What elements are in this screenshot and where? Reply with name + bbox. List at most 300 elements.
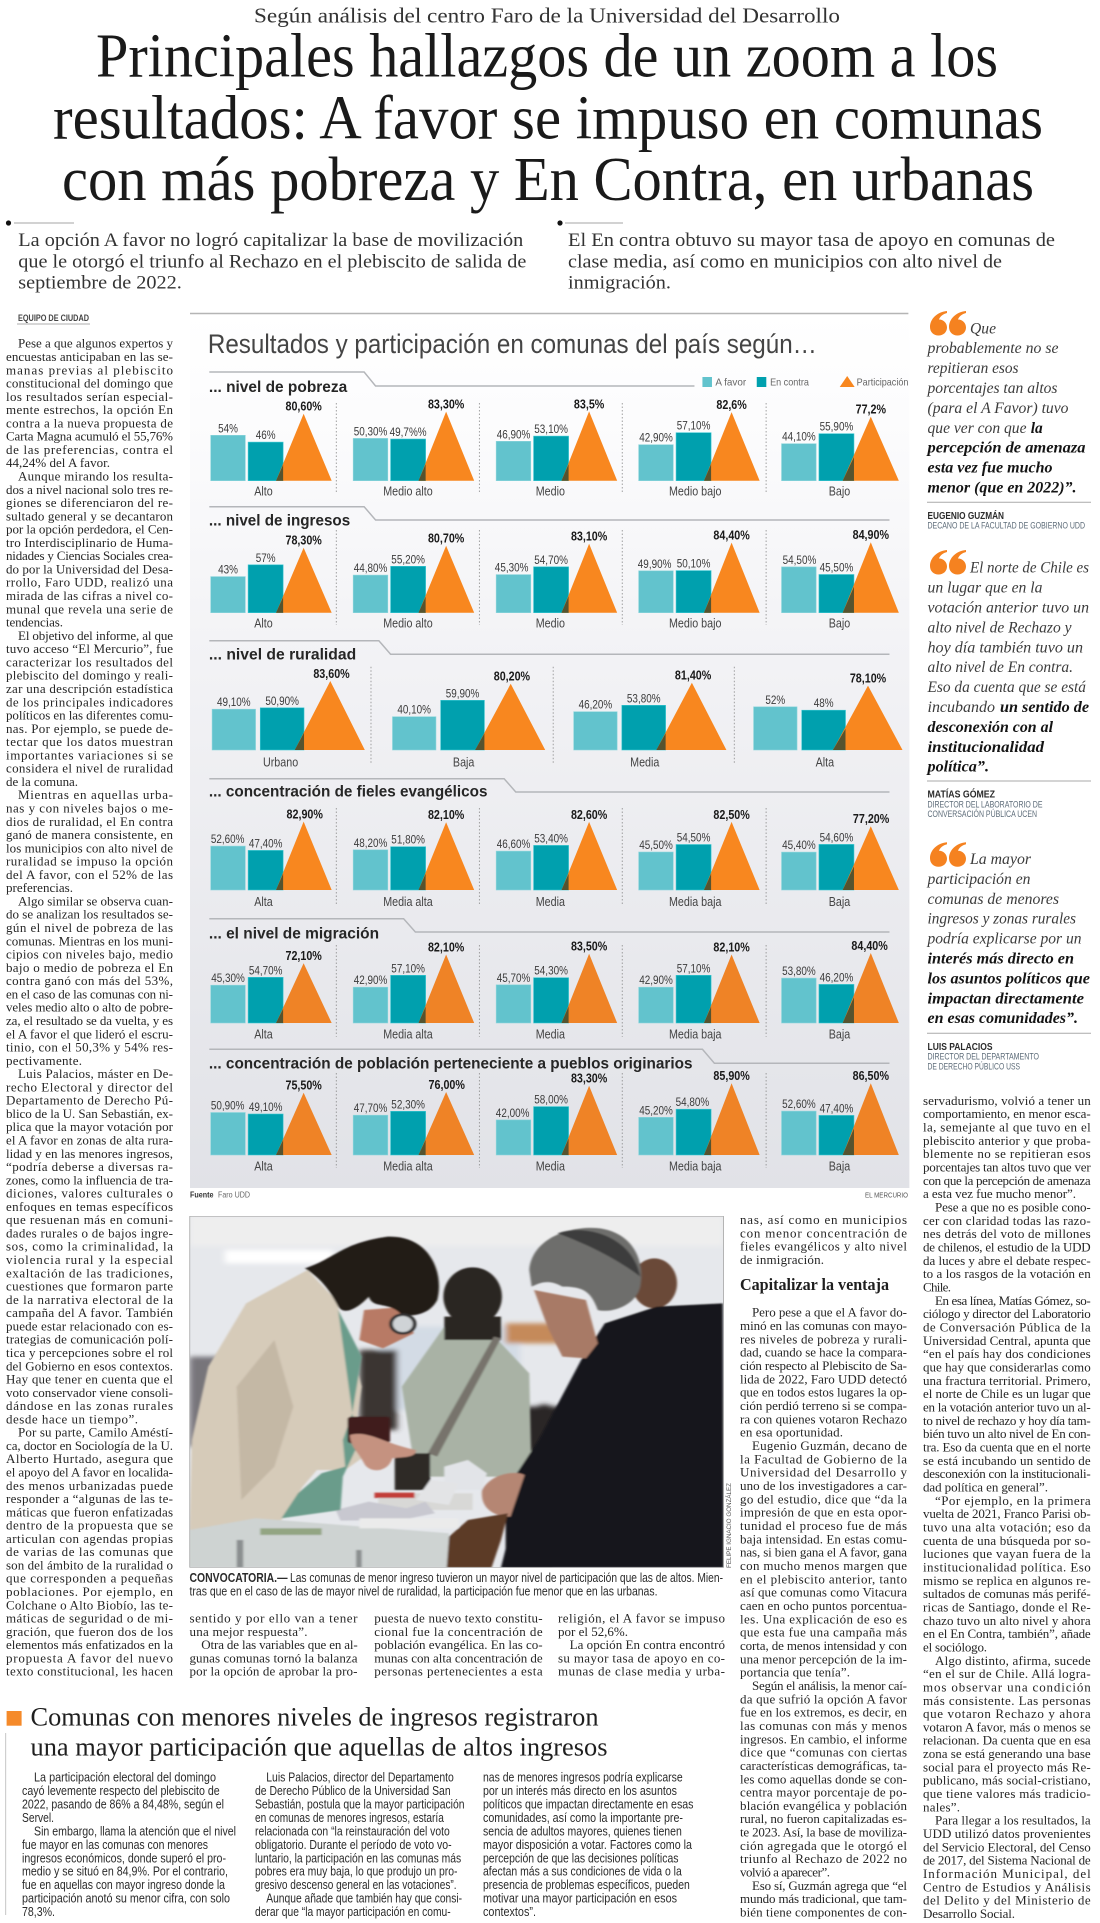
article last column: con que la percepción de amenaza bbox=[923, 1173, 1091, 1188]
pull quote: Matías Gómez: política”. bbox=[925, 759, 989, 776]
deck right bbox=[557, 220, 1055, 294]
ballot box bbox=[189, 1518, 449, 1568]
photo caption: Las comunas de menor ingreso tuvieron un mayor nivel de participación que las de altos. Mien- bbox=[290, 1571, 723, 1585]
legend: Participación bbox=[857, 378, 908, 389]
article column 1: gún el nivel de pobreza de las bbox=[6, 920, 173, 935]
article column 1: Departamento de Derecho Pú- bbox=[6, 1093, 173, 1108]
bars: Baja: 54,60% bbox=[820, 832, 853, 845]
heading: ... nivel de pobreza bbox=[209, 379, 347, 396]
sidebar column 1 bbox=[22, 1771, 236, 1919]
article column beside photo: fieles evangélicos y alto nivel bbox=[740, 1239, 907, 1254]
article last column: Centro de Estudios y Análisis bbox=[923, 1879, 1091, 1894]
bars: Alto: Alto bbox=[254, 484, 273, 499]
bars: Medio: 53,10% bbox=[534, 423, 568, 436]
article column beside photo: bién tiene componentes de con- bbox=[740, 1905, 907, 1920]
article column 1: exaltación de las tradiciones, bbox=[6, 1265, 173, 1280]
article last column: de chilenos, el estudio de la UDD bbox=[923, 1240, 1091, 1254]
bars: Media: 83,30% bbox=[571, 1071, 608, 1086]
article last column: tuvo una alta votación; eso da bbox=[923, 1520, 1091, 1534]
bars: Medio: 83,5% bbox=[574, 396, 605, 412]
article column 1: tinio, con el 50,3% y 54% res- bbox=[6, 1040, 173, 1054]
pull quote: Eugenio Guzmán: esta vez fue mucho bbox=[928, 460, 1052, 477]
article column 1 bbox=[6, 336, 174, 1679]
bars: Bajo: 45,50% bbox=[820, 562, 853, 575]
article last column: Información Municipal, del bbox=[923, 1866, 1091, 1881]
article column 1: zar una descripción estadística bbox=[6, 681, 173, 696]
heading: ... concentración de población perteneciente a pueblos originarios bbox=[209, 1055, 693, 1072]
article column 1: texto constitucional, les hacen bbox=[6, 1664, 174, 1679]
bars: Alta: 52,60% bbox=[211, 833, 245, 846]
icon: quote mark bbox=[930, 842, 966, 867]
article last column: “en el sur de Chile. Allá logra- bbox=[923, 1666, 1091, 1681]
article column beside photo: que esta fue una campaña más bbox=[740, 1625, 907, 1640]
bars: Alta bbox=[754, 671, 903, 770]
article column 1: máticas de seguridad o de mi- bbox=[6, 1611, 173, 1626]
bars: Baja: Baja bbox=[829, 894, 851, 909]
article column 1: son del ámbito de la ruralidad o bbox=[6, 1558, 173, 1572]
article column 1: Mientras en aquellas urba- bbox=[18, 787, 173, 802]
article last column: vuelta de 2021, Franco Parisi ob- bbox=[923, 1506, 1091, 1521]
pull quote: Matías Gómez: alto nivel de En contra. bbox=[928, 659, 1073, 676]
pull quote: Matías Gómez: El norte de Chile es bbox=[969, 560, 1089, 577]
bars: Baja: 47,40% bbox=[820, 1103, 853, 1116]
article column beside photo: dad, cuando se hace la compara- bbox=[740, 1345, 907, 1360]
hair behind man bbox=[632, 1258, 677, 1308]
bars: Alta: 48% bbox=[814, 697, 834, 710]
kicker: Según análisis del centro Faro de la Universidad del Desarrollo bbox=[254, 4, 840, 28]
article column 1: los municipios con alto nivel de bbox=[6, 840, 173, 855]
article last column: mos observar una condición bbox=[923, 1679, 1091, 1694]
bars: Media baja: 45,50% bbox=[639, 839, 673, 852]
article last column: en la votación anterior tuvo un al- bbox=[923, 1400, 1091, 1414]
sidebar column 3: presencia de problemas específicos, pueden bbox=[483, 1878, 690, 1892]
article last column: que hay que considerarlas como bbox=[923, 1360, 1091, 1374]
pull quote: Matías Gómez: hoy día también tuvo un bbox=[928, 639, 1083, 656]
pull quote: Luis Palacios: LUIS PALACIOS bbox=[928, 1042, 993, 1053]
article column 1: Carta Magna acumuló el 55,76% bbox=[6, 429, 173, 444]
article column beside photo: nas, si bien gana el A favor, gana bbox=[740, 1545, 907, 1560]
legend: En contra bbox=[770, 378, 809, 389]
article last column: de 2017, del Sistema Nacional de bbox=[923, 1853, 1091, 1868]
sidebar column 3: contextos”. bbox=[483, 1905, 536, 1919]
article column 1: tica y percepciones sobre el rol bbox=[6, 1345, 173, 1360]
bars: Media baja bbox=[639, 939, 760, 1042]
bars: Medio bajo: Medio bajo bbox=[669, 484, 722, 499]
article column 1: nas y con niveles bajos o me- bbox=[6, 800, 173, 816]
man jacket bbox=[506, 1303, 724, 1568]
article column beside photo: una menor percepción de la im- bbox=[740, 1651, 907, 1666]
sidebar column 3: por un interés más directo en los asuntos bbox=[483, 1784, 677, 1798]
bars: Alto: 46% bbox=[256, 429, 276, 442]
article column 1: cuestiones que formaron parte bbox=[6, 1279, 173, 1294]
article last column: Algo distinto, afirma, sucede bbox=[935, 1653, 1091, 1668]
article last column: votaron A favor, más o menos se bbox=[923, 1719, 1091, 1734]
article column beside photo: triunfo al Rechazo de 2022 no bbox=[740, 1851, 907, 1866]
bars: Alta bbox=[211, 807, 332, 909]
bars: Urbano: Urbano bbox=[263, 755, 298, 770]
bars: Baja bbox=[782, 1068, 899, 1174]
pull quote: Matías Gómez: institucionalidad bbox=[928, 739, 1045, 756]
deck right: inmigración. bbox=[568, 274, 671, 294]
bars: Baja: 52,60% bbox=[782, 1098, 816, 1111]
article column 1: Colchane o Alto Biobío, las te- bbox=[6, 1597, 173, 1612]
article column 1: el A favor en zonas de alta rura- bbox=[6, 1132, 173, 1148]
bars: Medio alto: 50,30% bbox=[354, 426, 388, 439]
article column beside photo: uno de los investigadores a car- bbox=[740, 1478, 907, 1493]
man head bbox=[534, 1290, 598, 1358]
sidebar column 2 bbox=[255, 1771, 465, 1919]
article column beside photo: ción perdió terreno si se compa- bbox=[740, 1398, 907, 1413]
pull quote: Eugenio Guzmán: percepción de amenaza bbox=[925, 440, 1086, 457]
bars: Media alta: Media alta bbox=[383, 894, 433, 909]
article column 1: máticas que fueron enfatizadas bbox=[6, 1504, 173, 1519]
article column beside photo: Universidad del Desarrollo y bbox=[740, 1465, 908, 1480]
article column beside photo bbox=[740, 1212, 908, 1920]
bars: Media baja: 54,50% bbox=[677, 832, 711, 845]
article column beside photo: de inmigración. bbox=[740, 1252, 824, 1267]
bars: Alta: 78,10% bbox=[850, 671, 887, 686]
article column 1: rrollo, Faro UDD, realizó una bbox=[6, 575, 173, 590]
bars: Medio alto: Medio alto bbox=[383, 484, 433, 499]
bars: Alto: 54% bbox=[218, 422, 238, 436]
bars: Media alta: 47,70% bbox=[354, 1102, 388, 1115]
article column 1: de la comuna. bbox=[6, 774, 78, 789]
article column 1: encuestas anticipaban en las se- bbox=[6, 349, 173, 364]
bars: Media baja: 82,50% bbox=[713, 807, 750, 822]
article last column: Desarrollo Social. bbox=[923, 1906, 1015, 1921]
subheading: Capitalizar la ventaja bbox=[740, 1275, 889, 1294]
article column 1: ruralidad se impuso la opción bbox=[6, 854, 174, 869]
bars: Media alta: 51,80% bbox=[391, 834, 425, 847]
article column beside photo: te 2023. Así, la base de moviliza- bbox=[740, 1825, 907, 1840]
pull quote: Matías Gómez: incubando bbox=[928, 699, 995, 716]
sidebar column 2: Luis Palacios, director del Departamento bbox=[266, 1771, 454, 1785]
article column beside photo: así que comunas como Vitacura bbox=[740, 1585, 907, 1600]
sidebar column 2: de Derecho Público de la Universidad San bbox=[255, 1784, 451, 1798]
sidebar column 1: fue mayor en las comunas con menores bbox=[22, 1838, 208, 1852]
sidebar column 1: participación anotó su menor cifra, con solo bbox=[22, 1892, 230, 1906]
article column 1: sultado general y se decantaron bbox=[6, 508, 174, 523]
bars: Medio bajo bbox=[639, 397, 760, 499]
bars: Alta: 45,30% bbox=[211, 972, 245, 985]
article column beside photo: caen en ocho puntos porcentua- bbox=[740, 1598, 907, 1613]
bars: Media: 58,00% bbox=[534, 1094, 568, 1107]
article last column: ciólogo y director del Laboratorio bbox=[923, 1306, 1091, 1321]
bars: Media: 53,40% bbox=[534, 833, 568, 846]
article last column: zona se está generando una base bbox=[923, 1746, 1091, 1761]
article column 4 under photo: munas de clase media y urba- bbox=[558, 1664, 725, 1679]
article column beside photo: ción agregada que le otorgó el bbox=[740, 1838, 907, 1853]
bars: Medio bajo: 82,6% bbox=[716, 397, 747, 412]
article column 1: blico de la U. San Sebastián, ex- bbox=[6, 1106, 173, 1121]
ballot papers on table bbox=[378, 1493, 473, 1510]
bars: Medio: 46,90% bbox=[497, 428, 530, 442]
bars: Media baja bbox=[639, 807, 760, 909]
icon: orange square bbox=[7, 1711, 22, 1726]
bars: Medio bajo bbox=[638, 528, 760, 631]
pull quote: Luis Palacios: podría explicarse por un bbox=[927, 931, 1082, 948]
article column 1: sos, como la criminalidad, la bbox=[6, 1239, 173, 1254]
sidebar column 1: medio y se situó en 84,9%. Por el contrario, bbox=[22, 1865, 228, 1879]
article column 1: en el caso de las comunas con ni- bbox=[6, 986, 173, 1001]
bars: Bajo: 54,50% bbox=[783, 554, 816, 567]
article last column: En esa línea, Matías Gómez, so- bbox=[935, 1293, 1091, 1308]
pull quote: Matías Gómez: DIRECTOR DEL LABORATORIO DE bbox=[928, 799, 1042, 809]
article column 1: mente estrechos, la opción En bbox=[6, 402, 174, 417]
bars: Media: 83,50% bbox=[571, 939, 608, 954]
article last column: cuenta de una búsqueda por so- bbox=[923, 1533, 1091, 1548]
article column 1: articulan con agendas propias bbox=[6, 1531, 173, 1546]
article column 1: plica que la mayor votación por bbox=[6, 1119, 174, 1134]
bars: Media: 54,30% bbox=[534, 965, 568, 978]
bars: Media: Media bbox=[630, 755, 660, 770]
article column 1: tuvo acceso “El Mercurio”, fue bbox=[6, 641, 173, 656]
bars: Urbano: 50,90% bbox=[265, 695, 299, 708]
bars: Baja: 77,20% bbox=[853, 811, 890, 826]
article last column: una fractura territorial. Primero, bbox=[923, 1373, 1091, 1388]
bars: Alta: Alta bbox=[254, 1159, 273, 1174]
article column 1: caracterizar los resultados del bbox=[6, 654, 173, 669]
article last column bbox=[923, 1093, 1091, 1921]
bars: Alta: 82,90% bbox=[287, 807, 323, 822]
chart section: pueblos originarios bbox=[209, 1049, 899, 1174]
chart source: Fuente bbox=[190, 1190, 214, 1200]
bars: Alta: 49,10% bbox=[249, 1101, 283, 1114]
pull quote: Eugenio Guzmán: menor (que en 2022)”. bbox=[928, 480, 1076, 496]
chart title: Resultados y participación en comunas del país según… bbox=[208, 329, 817, 359]
bars: Urbano: 83,60% bbox=[313, 666, 350, 681]
article column 1: giones se diferenciaron del re- bbox=[6, 495, 173, 510]
photo: voters at polling station bbox=[189, 1216, 724, 1568]
heading: ... nivel de ruralidad bbox=[209, 646, 356, 663]
article column beside photo: les como aquellas donde se con- bbox=[740, 1771, 907, 1786]
sidebar column 3: políticos que impactan directamente en esas bbox=[483, 1798, 694, 1812]
bars: Media: 46,60% bbox=[497, 838, 530, 851]
article column 1: de los principales indicadores bbox=[6, 694, 173, 709]
bars: Medio alto: 44,80% bbox=[354, 562, 388, 575]
bars: Alto: 43% bbox=[218, 564, 238, 577]
article column 1: veles medio alto o alto de pobre- bbox=[6, 1000, 173, 1015]
bars: Bajo bbox=[782, 527, 899, 631]
article last column: de Conversación Pública de la bbox=[923, 1320, 1091, 1334]
article column 1: los resultados serían especial- bbox=[6, 389, 173, 404]
chart section: fieles evangélicos bbox=[209, 779, 899, 909]
bars: Baja: 86,50% bbox=[853, 1068, 889, 1083]
bars: Bajo: Bajo bbox=[829, 616, 851, 631]
article last column: chazo tuvo un alto nivel y ahora bbox=[923, 1613, 1091, 1628]
pull quote: Matías Gómez: CONVERSACIÓN PÚBLICA UCEN bbox=[928, 809, 1037, 819]
article column beside photo: da que sufrió la opción A favor bbox=[740, 1691, 908, 1706]
background person bbox=[402, 1327, 532, 1477]
heading: ... el nivel de migración bbox=[209, 925, 379, 942]
bars: Media: Media bbox=[536, 1159, 565, 1174]
article column beside photo: nas, así como en municipios bbox=[740, 1212, 907, 1227]
article last column: luciones que vayan fuera de la bbox=[923, 1546, 1091, 1561]
chart source bbox=[190, 1190, 908, 1200]
article column 1: Algo similar se observa cuan- bbox=[18, 894, 173, 908]
heading: ... concentración de fieles evangélicos bbox=[209, 784, 488, 801]
bars: Bajo: 77,2% bbox=[856, 402, 886, 417]
article column 1: elementos más enfatizados en la bbox=[6, 1637, 173, 1652]
article column 1: dades rurales o de bajos ingre- bbox=[6, 1226, 173, 1240]
bars: Alta bbox=[211, 948, 332, 1042]
article last column: Universidad Central, apunta que bbox=[923, 1333, 1091, 1348]
article column 1: constitucional del domingo que bbox=[6, 376, 173, 390]
article last column: plebiscito anterior y que proba- bbox=[923, 1133, 1091, 1148]
pull quote: Matías Gómez: votación anterior tuvo un bbox=[928, 600, 1089, 616]
article last column: sultados de comunas más perifé- bbox=[923, 1586, 1091, 1601]
article last column: da luces y abre el debate respec- bbox=[923, 1253, 1091, 1268]
article column beside photo: en el plebiscito anterior, tanto bbox=[740, 1571, 907, 1586]
bars: Media: 82,60% bbox=[571, 807, 608, 822]
bars: Media alta: 52,30% bbox=[391, 1098, 425, 1112]
title: con más pobreza y En Contra, en urbanas bbox=[62, 146, 1034, 214]
article column 3 under photo: puesta de nuevo texto constitu- bbox=[374, 1611, 543, 1626]
sidebar column 1: La participación electoral del domingo bbox=[34, 1771, 216, 1785]
article last column: dad política en general”. bbox=[923, 1480, 1048, 1494]
article last column: Chile. bbox=[923, 1280, 951, 1294]
sidebar column 3: motivar una mayor participación en esos bbox=[483, 1892, 677, 1906]
heading: ... nivel de ingresos bbox=[209, 513, 350, 530]
article column 1: por la opción perdedora, el Cen- bbox=[6, 522, 173, 537]
bars: Baja: 84,40% bbox=[851, 938, 888, 953]
article column 1: tectar que los datos muestran bbox=[6, 734, 174, 749]
article column 2 under photo: una mejor respuesta”. bbox=[190, 1624, 308, 1639]
bars: Media: 81,40% bbox=[675, 668, 712, 683]
bars: Media baja: 42,90% bbox=[639, 974, 673, 987]
photo credit: FELIPE IGNACIO GONZÁLEZ bbox=[724, 1483, 733, 1568]
bars: Baja bbox=[782, 811, 899, 909]
article column 2 under photo: sentido y por ello van a tener bbox=[190, 1611, 358, 1626]
pull quote: Luis Palacios: DIRECTOR DEL DEPARTAMENTO bbox=[928, 1051, 1039, 1061]
article last column: “en el país hay dos condiciones bbox=[923, 1346, 1091, 1361]
article last column: ricas de Santiago, donde el Re- bbox=[923, 1599, 1091, 1614]
pull quote: Eugenio Guzmán: repitieran esos bbox=[928, 360, 1018, 377]
article column 3 under photo: munas con alta concentración de bbox=[374, 1650, 543, 1665]
sidebar column 2: en comunas de menores ingresos, estaría bbox=[255, 1811, 444, 1825]
bars: Medio bajo: 57,10% bbox=[677, 420, 711, 433]
article column 1: dándose en las zonas rurales bbox=[6, 1398, 173, 1413]
bars: Bajo: 44,10% bbox=[782, 431, 816, 444]
bars: Baja bbox=[392, 669, 545, 770]
bars: Media bbox=[574, 668, 726, 770]
article column 1: recho Electoral y director del bbox=[6, 1079, 173, 1094]
sidebar heading bbox=[30, 1703, 608, 1762]
bars: Media alta: 76,00% bbox=[429, 1077, 465, 1092]
article column beside photo: res niveles de pobreza y rurali- bbox=[740, 1331, 907, 1346]
bars: Media: 46,20% bbox=[579, 699, 612, 712]
bars: Urbano bbox=[212, 666, 365, 770]
article column 1: desde hace un tiempo”. bbox=[6, 1411, 138, 1426]
article column beside photo: la Facultad de Gobierno de la bbox=[740, 1451, 907, 1466]
bars: Alta: 50,90% bbox=[211, 1100, 245, 1113]
pull quote: Matías Gómez bbox=[925, 550, 1091, 819]
article column beside photo: Eugenio Guzmán, decano de bbox=[752, 1438, 907, 1453]
pull quote: Luis Palacios: los asuntos políticos que bbox=[928, 970, 1090, 987]
sidebar column 1: ingresos económicos, donde superó el pro- bbox=[22, 1851, 226, 1865]
bars: Media: Media bbox=[536, 1027, 565, 1042]
sidebar column 3: sencia de adultos mayores, quienes tienen bbox=[483, 1824, 682, 1838]
sidebar column 3: afectan más a sus condiciones de vida o la bbox=[483, 1865, 682, 1879]
bars: Media alta: 82,10% bbox=[428, 807, 465, 822]
article column 1: do se analizan los resultados se- bbox=[6, 907, 173, 922]
pull quote: Luis Palacios: ingresos y zonas rurales bbox=[928, 911, 1076, 928]
bars: Medio bbox=[496, 396, 617, 499]
sidebar column 2: Aunque añade que también hay que consi- bbox=[266, 1891, 462, 1906]
pull quote: Eugenio Guzmán: Que bbox=[970, 320, 996, 337]
bars: Media alta bbox=[353, 939, 474, 1042]
sidebar column 3: mayor disposición a votar. Factores como la bbox=[483, 1838, 692, 1852]
bars: Baja: Baja bbox=[829, 1027, 851, 1042]
bars: Medio: 83,10% bbox=[571, 529, 608, 544]
article column 1: enfoques en temas específicos bbox=[6, 1199, 173, 1214]
bars: Media: 45,70% bbox=[497, 972, 530, 985]
pull quote: Eugenio Guzmán: la bbox=[1031, 420, 1043, 437]
article column beside photo: les. Una explicación de eso es bbox=[740, 1611, 907, 1626]
bars: Media baja: 54,80% bbox=[676, 1096, 709, 1109]
article column beside photo: tunidad el proceso fue de más bbox=[740, 1518, 907, 1533]
article column 1: voto conservador viene consoli- bbox=[6, 1385, 173, 1400]
article column 1: puede estar relacionado con es- bbox=[6, 1318, 173, 1333]
article column 1: zones, como la influencia de tra- bbox=[6, 1172, 173, 1187]
article column 1: za, el resultado se da vuelta, y es bbox=[6, 1013, 173, 1028]
article column beside photo: rural, no fueron capitalizadas es- bbox=[740, 1811, 907, 1826]
article column 1: ca, doctor en Sociología de la U. bbox=[6, 1438, 173, 1453]
article column 1: ganó de manera consistente, en bbox=[6, 827, 174, 842]
sidebar column 1: 78,3%. bbox=[22, 1905, 55, 1919]
icon: quote mark bbox=[930, 550, 966, 574]
pull quote: Eugenio Guzmán bbox=[925, 311, 1091, 531]
article column 1: de varias de las comunas que bbox=[6, 1544, 173, 1559]
article last column: la, semejante al que tuvo en el bbox=[923, 1120, 1091, 1135]
article column beside photo: ingresos. En cambio, el informe bbox=[740, 1731, 907, 1746]
bars: Alto: 80,60% bbox=[285, 399, 322, 414]
article column beside photo: con menor concentración de bbox=[740, 1225, 907, 1240]
bars: Alta: 47,40% bbox=[249, 838, 283, 851]
article column 1: que corresponden a pequeñas bbox=[6, 1571, 173, 1586]
bars: Medio alto: 83,30% bbox=[428, 397, 465, 412]
article column 1: manas previas al plebiscito bbox=[6, 362, 173, 377]
bars: Media: 53,80% bbox=[627, 692, 661, 706]
bars: Alto bbox=[211, 533, 332, 631]
article column 4 under photo bbox=[558, 1611, 725, 1679]
bars: Bajo: 55,90% bbox=[820, 421, 853, 434]
article column beside photo: minó en las comunas con mayo- bbox=[740, 1318, 907, 1333]
article last column: porcentajes tan altos tuvo que ver bbox=[923, 1160, 1091, 1175]
chart section: nivel de pobreza bbox=[209, 372, 899, 499]
title: Principales hallazgos de un zoom a los bbox=[96, 22, 998, 90]
bars: Bajo: 84,90% bbox=[853, 527, 889, 542]
article last column: cer con claridad todas las razo- bbox=[923, 1213, 1091, 1228]
bars: Medio alto bbox=[353, 531, 474, 631]
article column beside photo: que en todos estos lugares la op- bbox=[740, 1385, 907, 1400]
article column 1: trategias de comunicación polí- bbox=[6, 1332, 173, 1347]
bars: Media alta bbox=[353, 807, 474, 909]
article column 1: nas. Por ejemplo, se puede de- bbox=[6, 721, 173, 736]
bars: Baja: 59,90% bbox=[446, 687, 480, 701]
article column beside photo: impresión de que en esta opor- bbox=[740, 1505, 907, 1520]
sidebar column 2: gresivo descenso general en las votaciones”. bbox=[255, 1878, 457, 1892]
pull quote: Eugenio Guzmán: (para el A Favor) tuvo bbox=[928, 400, 1068, 417]
bars: Media alta: Media alta bbox=[383, 1027, 433, 1042]
bars: Media alta: 57,10% bbox=[391, 962, 425, 976]
bars: Media baja bbox=[639, 1068, 760, 1174]
article column beside photo: Pero pese a que el A favor do- bbox=[752, 1305, 907, 1320]
chart source: EL MERCURIO bbox=[865, 1191, 908, 1200]
article last column: se está incubando un sentido de bbox=[923, 1453, 1091, 1468]
bars: Media bbox=[496, 939, 617, 1042]
bars: Media baja: Media baja bbox=[669, 894, 722, 909]
